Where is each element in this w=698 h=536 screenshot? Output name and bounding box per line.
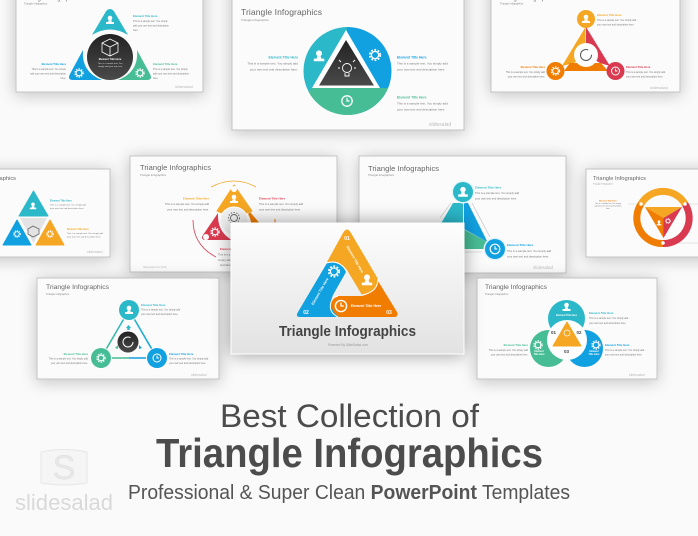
green segment — [458, 229, 486, 249]
numbers: 02 — [576, 330, 582, 335]
circle segments — [304, 27, 392, 115]
callout text group: Element Title Here — [589, 311, 614, 315]
blue segment — [464, 202, 488, 243]
connector lines — [628, 204, 698, 243]
callout text group: This is a sample text. You simply add — [597, 19, 637, 22]
numbers: 01 — [551, 330, 556, 335]
inner triangle segments — [645, 207, 682, 218]
slide: ring and triangle, middle right — [586, 169, 698, 257]
callout text group: slidesalad — [533, 265, 554, 270]
callout text group: This is a sample text. You simply add — [165, 202, 209, 206]
callout text group: slidesalad — [629, 373, 645, 377]
callout text group: Element Title Here — [133, 14, 158, 18]
callout text group: This is a sample text. You simply add — [507, 249, 552, 253]
slide: triangle in circle, top centre: Triangle Infographics — [241, 18, 269, 22]
callout text group: This is a sample text. You simply add — [506, 71, 546, 74]
dark centre circle — [87, 34, 133, 80]
band numbers: 03 — [386, 310, 392, 316]
triangle outline — [101, 310, 129, 358]
callout text group: your own text and description here. — [51, 362, 88, 365]
callout text group: This is a sample text. You simply add — [49, 358, 89, 360]
dark centre circle — [118, 332, 138, 352]
band labels — [311, 245, 381, 308]
callout text group: your own text and description here. — [508, 76, 545, 78]
callout text group: Element Title Here — [507, 243, 533, 247]
callout text group: here. — [61, 77, 66, 80]
callout text group: Element Title Here — [141, 303, 166, 307]
callout text group: Element Title Here — [556, 314, 578, 317]
callout text group: This is a sample text. You simply — [133, 20, 168, 23]
callout text group: This is a sample — [218, 252, 238, 256]
tagline: Professional & Super Clean PowerPoint Templates — [128, 482, 570, 504]
callout text group: slidesalad — [87, 250, 103, 254]
callout text group: Element Title Here — [475, 186, 501, 190]
logo wordmark: slidesalad — [15, 490, 113, 515]
callout text group: This is a sample text. You simply add — [259, 202, 304, 206]
callout text group: This is a sample text. You simply add — [475, 191, 520, 195]
callout text group: slidesalad — [191, 373, 207, 377]
callout text group: slidesalad — [650, 85, 668, 90]
callout text group — [475, 186, 554, 270]
callout text group: This is a sample text. You simply — [31, 68, 67, 71]
callout text group — [50, 200, 104, 254]
callout text group: and description — [220, 263, 239, 267]
callout text group: Element Title Here — [42, 62, 66, 66]
callout text group: This is a sample text. You simply add — [589, 317, 629, 320]
callout text group — [489, 311, 645, 377]
callout text group: your own text and description here. — [250, 68, 298, 72]
blue triangle — [3, 220, 31, 245]
callout text group: here. — [606, 208, 611, 210]
logo: slidesalad — [15, 449, 113, 515]
yellow segment — [217, 185, 252, 213]
slide: triangle with arcs, middle: Triangle Infographics — [140, 163, 211, 172]
node: left — [90, 347, 112, 369]
node: right — [484, 238, 506, 260]
band numbers: 01 — [344, 236, 350, 242]
callout text group: add your own text and description — [30, 72, 67, 76]
ring nodes — [639, 202, 687, 245]
slide: circle inside triangle, top left — [16, 0, 203, 92]
callout text group: your own text and description here. — [589, 322, 627, 325]
headline line 2: Triangle Infographics — [156, 430, 543, 476]
grey inverted triangle — [20, 218, 47, 243]
callout text group: here. — [133, 29, 139, 32]
centre circle — [220, 207, 248, 235]
callout text group: your own text and description here. — [605, 354, 643, 356]
slide: connected circles, bottom left: Triangle Infographics — [46, 293, 70, 296]
callout text group: Element — [220, 247, 232, 251]
callout text group: This is a sample text. You simply add — [397, 102, 448, 106]
slide: overlapping circles, bottom right — [477, 278, 657, 379]
band labels: Element Title Here — [311, 277, 330, 306]
callout text group: your own text and description here. — [50, 207, 84, 210]
ring segments — [637, 191, 689, 244]
icon: bulb — [338, 60, 356, 76]
dark triangle with white border — [312, 30, 380, 88]
callout text group: This is a sample text. You simply add — [397, 62, 448, 66]
callout text group: Element Title Here — [597, 13, 622, 17]
callout text group: Element Title Here — [504, 343, 528, 347]
triangle segments — [562, 27, 586, 66]
arcs — [211, 181, 256, 187]
yellow triangle — [553, 322, 581, 346]
callout text group: add your own text and description — [153, 72, 189, 76]
icon: centre bulb — [228, 212, 240, 224]
callout text group: Element Title Here — [169, 352, 194, 356]
callout text group: Element Title Here — [397, 56, 427, 60]
blue band — [297, 262, 346, 317]
callout text group: This is a sample text. You simply add — [67, 232, 104, 235]
slide: triangle with arcs, middle — [130, 156, 337, 272]
slide: ring and triangle, middle right: Triangle Infographics — [593, 176, 646, 182]
slide: triangle in circle, top centre — [232, 0, 464, 130]
node: top — [118, 299, 140, 321]
slide: triangle in circle, top centre: Triangle Infographics — [241, 7, 322, 17]
blue circle — [566, 330, 603, 367]
callout text group: slidesalad — [429, 122, 451, 128]
callout text group: your own text and description here. — [169, 362, 207, 365]
slide: overlapping circles, bottom right: Triangle Infographics — [485, 284, 548, 291]
callout text group: your own text and description here. — [397, 108, 445, 112]
teal segment — [436, 203, 463, 232]
callout text group: Slidesalad.com 2018 — [143, 266, 167, 269]
callout text group — [506, 13, 668, 90]
callout text group: This is a sample text. You simply add — [169, 358, 209, 360]
centre circle — [574, 43, 598, 67]
slide: circle inside triangle, top left: simply add your own text — [98, 65, 122, 68]
callout text group: This is a sample text. You simply add — [626, 71, 666, 74]
callout text group: Element Title Here — [259, 196, 285, 200]
callout text group: Element Title Here — [50, 200, 72, 202]
callout text group: here. — [153, 77, 159, 80]
callout text group: Element — [534, 350, 544, 353]
slide: triangle with arcs, middle: Triangle Infographics — [140, 173, 167, 177]
small arrows — [115, 325, 142, 349]
red segment — [202, 213, 232, 240]
slide: stacked triangles, middle left — [0, 169, 110, 257]
node: right — [146, 347, 168, 369]
band numbers: 02 — [303, 310, 309, 316]
featured title: Triangle Infographics — [279, 324, 416, 340]
callout text group — [30, 14, 193, 89]
callout text group — [143, 196, 304, 269]
band labels: Element Title Here — [351, 304, 381, 308]
callout text group: This is a sample text. You simply add — [247, 62, 298, 66]
slide: connected circles, bottom left — [37, 278, 219, 379]
callout text group: Element — [589, 350, 599, 353]
teal circle — [548, 300, 585, 337]
powered by line: Powered By SlideSalad.com — [328, 343, 368, 347]
callout text group: add your own text and description — [133, 24, 169, 28]
node: top — [452, 180, 474, 204]
yellow band — [327, 230, 378, 295]
callout text group: This is a sample text. You simply add — [605, 349, 645, 352]
callout text group: Title Here — [534, 353, 545, 356]
numbers: 03 — [564, 349, 569, 354]
callout text group: This is a sample text. You simply add — [141, 308, 181, 312]
white separators — [326, 262, 378, 317]
slide: ring and triangle, middle right: Triangle Infographics — [593, 182, 614, 186]
callout text group: your own text and description here. — [491, 354, 528, 356]
callout text group: Element Title Here — [626, 65, 651, 69]
callout text group: simply add your — [218, 258, 237, 262]
slide: circle inside triangle, top left: Triangle Infographics — [24, 2, 48, 6]
slide: circle inside triangle, top left: Element Title Here — [99, 57, 122, 61]
callout text group: your own text and description here. — [507, 254, 549, 258]
orange segment — [248, 212, 262, 232]
callout text group: your own text and description here. — [259, 208, 301, 212]
slide: featured triangle, centre — [231, 223, 464, 354]
orange band — [330, 281, 398, 317]
slide: triangle with labelled segments, middle: Triangle Infographics — [368, 173, 395, 177]
callout text group: your own text and description here. — [67, 236, 101, 238]
callout text group: Element Title Here — [268, 56, 298, 60]
teal triangle — [19, 191, 48, 216]
green circle — [530, 330, 567, 367]
icon: box — [102, 39, 118, 56]
callout text group: your own text and description here. — [626, 76, 664, 78]
callout text group — [247, 56, 451, 128]
callout text group: your own text and description here. — [141, 313, 179, 316]
callout text group: Element Title Here — [397, 96, 427, 100]
callout text group — [595, 200, 621, 210]
logo icon: S — [53, 449, 75, 487]
callout text group: your own text and description here. — [397, 68, 445, 72]
slide: connected circles, bottom left: Triangle Infographics — [46, 284, 110, 291]
green right segment — [118, 50, 151, 80]
callout text group: Element Title Here — [599, 200, 618, 202]
numbers — [551, 330, 582, 354]
callout text group: your own text and description here. — [475, 196, 517, 200]
callout text group: Element Title Here — [521, 65, 545, 69]
slide: circle inside triangle, top left: This is a sample text. You — [98, 62, 123, 65]
callout text group: slidesalad — [175, 84, 193, 89]
callout text group: your own text and description here. — [597, 24, 635, 26]
band labels: Element Title Here — [346, 245, 364, 274]
slide: overlapping circles, bottom right: Triangle Infographics — [485, 293, 509, 296]
callout text group: Element Title Here — [67, 228, 89, 231]
slide: three nodes, top right — [491, 0, 680, 92]
callout text group: This is a sample text. You simply add — [50, 204, 87, 206]
slide: three nodes, top right: Triangle Infographics — [500, 2, 524, 6]
callout text group: This is a sample text. You simply add — [489, 349, 529, 352]
node: right — [606, 62, 624, 80]
blue left segment — [69, 50, 102, 80]
callout text group: Element Title Here — [605, 343, 630, 347]
callout text group — [49, 303, 209, 377]
node: top — [577, 10, 595, 28]
white centre circle — [547, 320, 587, 360]
callout text group: your own text and description here. — [167, 208, 209, 212]
band numbers — [303, 236, 392, 316]
callout text group: Element Title Here — [64, 352, 88, 356]
teal top segment — [92, 9, 128, 35]
headline line 1: Best Collection of — [220, 398, 479, 434]
outline arrows — [440, 203, 490, 252]
yellow triangle — [36, 220, 64, 245]
slide: triangle with labelled segments, middle: Triangle Infographics — [368, 164, 439, 173]
callout text group: Element Title Here — [183, 196, 209, 200]
callout text group: add your own text and description — [595, 204, 621, 208]
callout text group: This is a sample text. You simply — [595, 202, 621, 205]
callout text group: Element Title Here — [153, 62, 178, 66]
callout text group: This is a sample text. You simply — [153, 68, 188, 71]
slide: triangle with labelled segments, middle — [359, 156, 566, 273]
callout text group: Title Here — [589, 353, 600, 356]
node: left — [546, 62, 564, 80]
